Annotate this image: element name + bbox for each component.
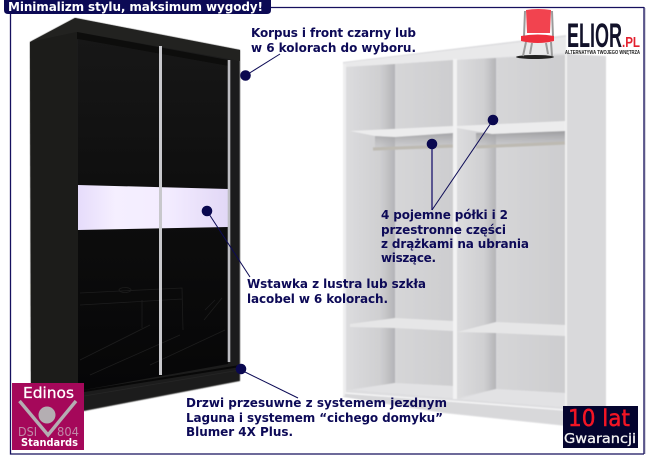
hanging rail right [476,143,565,147]
white wardrobe (open interior) [343,35,606,426]
callout: mirror insert: lacobel w 6 kolorach. [247,292,388,306]
logo: Elior: .PL [622,34,640,51]
black wardrobe [30,18,240,412]
callout: body colours: w 6 kolorach do wyboru. [251,41,416,55]
central divider [453,59,457,399]
callout: sliding doors: Drzwi przesuwne z systemem jezdnym [186,396,447,410]
right compartment left wall [457,58,496,398]
callout: body colours: Korpus i front czarny lub [251,26,416,40]
badge: 10 year warranty [563,406,638,448]
right inner edge [565,54,567,410]
top face [343,37,566,67]
callout: shelves and rails: 4 pojemne półki i 2 [381,208,508,222]
wardrobe body [343,35,606,426]
badge: Edinos standards: Standards [21,437,78,449]
right side panel [567,54,606,424]
callout: shelves and rails [381,115,529,265]
badge: Edinos standards: Edinos [23,384,74,402]
side panel [30,32,78,412]
right compartment back wall [496,55,565,393]
door reflection: table [80,288,225,375]
mirror insert [78,185,228,230]
callout: mirror insert [202,206,426,306]
badge: Edinos standards [12,383,84,450]
floor left [353,383,453,398]
floor right [460,389,565,407]
upper shelf right [457,121,565,134]
body [30,18,240,411]
sliding doors [78,39,228,391]
door top shadow [77,32,228,66]
upper shelf shadows [375,131,565,149]
lower shelf right [457,322,565,336]
logo: Elior [516,9,640,59]
door rail right [228,60,230,362]
callout: sliding doors: Laguna i systemem “cichego domyku” [186,411,443,425]
callout: mirror insert: Wstawka z lustra lub szkła [247,277,426,291]
left compartment walls [346,64,395,390]
plinth [345,393,565,425]
door rail centre [159,46,162,375]
badge: Edinos standards: DSI [18,425,37,439]
callout: body colours [240,26,416,81]
icon: red chair [516,9,554,59]
top face [30,18,240,61]
callout: shelves and rails: wiszące. [381,251,436,265]
callout: shelves and rails: przestronne części [381,223,506,237]
hanging rail left [373,146,453,149]
callout: shelves and rails: z drążkami na ubrania [381,237,529,251]
callout: sliding doors [186,364,447,439]
base shadow line [78,366,240,392]
badge: 10 year warranty: Gwarancji [564,432,636,447]
lower shelf left [350,318,453,331]
left edge [343,64,346,396]
upper shelf left [350,126,453,137]
callout: sliding doors: Blumer 4X Plus. [186,425,293,439]
badge: Edinos standards: 804 [57,425,79,439]
left compartment back wall [395,60,453,386]
badge: 10 year warranty: 10 lat [568,406,630,432]
title banner: Minimalizm stylu, maksimum wygody! [8,0,263,14]
